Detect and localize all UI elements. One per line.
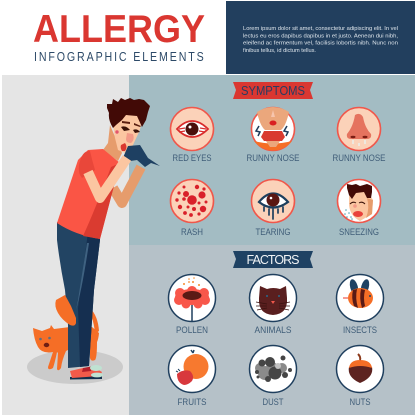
trousers — [57, 222, 100, 368]
cat — [33, 308, 99, 370]
back arm — [113, 167, 141, 203]
label: runny nose: RUNNY NOSE — [332, 153, 386, 164]
label: dust: DUST — [262, 397, 284, 408]
tissue — [122, 145, 160, 167]
neck — [103, 125, 122, 161]
shirt — [57, 149, 120, 239]
hair — [107, 98, 150, 128]
icon: animals — [250, 274, 296, 322]
icon: sneezing — [338, 180, 380, 222]
panel: intro text: Lorem ipsum dolor sit amet, consectetur adipiscing elit. In vel — [243, 26, 398, 32]
panel: factors — [129, 245, 415, 415]
icon: nuts — [336, 346, 384, 392]
panel: intro text: finibus tellus, id dictum tellus. — [243, 48, 316, 54]
floor shadow — [27, 350, 123, 384]
figure: man with tissue and cat — [27, 98, 160, 384]
label: runny nose: RUNNY NOSE — [246, 153, 300, 164]
icon: dust — [250, 346, 296, 392]
label: tearing: TEARING — [256, 227, 290, 238]
icon: tearing — [252, 180, 294, 222]
banner: factors: FACTORS — [246, 253, 300, 267]
head — [113, 115, 142, 153]
banner: factors — [233, 251, 313, 268]
front arm — [88, 158, 127, 198]
subtitle: INFOGRAPHIC ELEMENTS — [34, 49, 204, 64]
label: animals: ANIMALS — [254, 325, 292, 336]
label: nuts: NUTS — [350, 397, 370, 408]
icon: runny nose — [338, 108, 380, 150]
cat rear — [55, 295, 76, 326]
icon: rash — [170, 180, 214, 222]
background panel: figure — [2, 75, 129, 415]
label: insects: INSECTS — [343, 325, 377, 336]
label: fruits: FRUITS — [178, 397, 206, 408]
icon: fruits — [168, 346, 216, 392]
panel: symptoms — [129, 75, 415, 245]
label: red eyes: RED EYES — [172, 153, 212, 164]
shoe — [70, 365, 103, 380]
title: ALLERGY — [33, 8, 205, 51]
label: rash: RASH — [181, 227, 203, 238]
icon: sore throat — [252, 107, 294, 150]
panel: intro text — [226, 1, 415, 74]
icon: pollen — [168, 274, 216, 322]
label: pollen: POLLEN — [176, 325, 208, 336]
icon: red eyes — [170, 108, 214, 150]
label: sneezing: SNEEZING — [339, 227, 379, 238]
icon: insects — [336, 274, 384, 322]
panel: intro text: lectus eu eros dapibus dapibus in et justo. Aenean dui nibh, — [243, 33, 399, 39]
panel: intro text: eleifend ac fermentum vel, facilisis lobortis nibh. Nunc non — [243, 41, 398, 47]
banner: symptoms: SYMPTOMS — [241, 84, 305, 98]
